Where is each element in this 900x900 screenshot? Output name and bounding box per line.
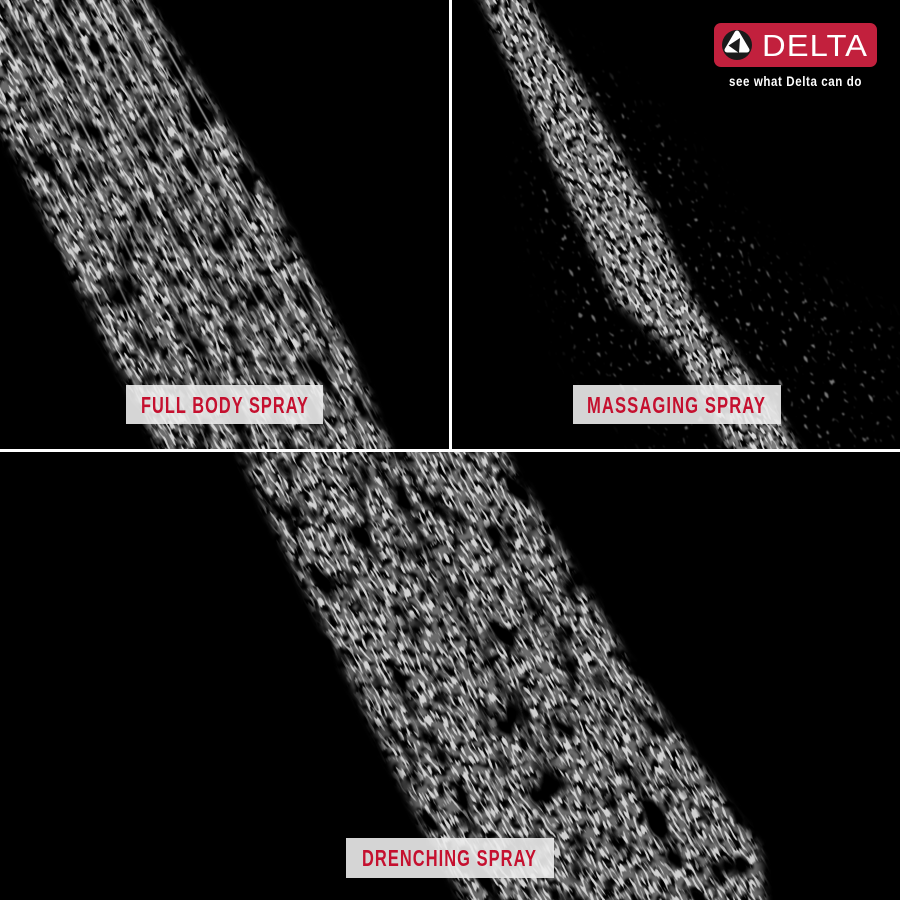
label: full body spray (126, 385, 323, 424)
label: drenching spray: DRENCHING SPRAY (362, 845, 537, 871)
jet streams (0, 0, 390, 460)
label: full body spray: FULL BODY SPRAY (141, 392, 309, 418)
panel: massaging spray (476, 0, 900, 449)
tagline: see what Delta can do (729, 74, 862, 89)
logo wordmark: DELTA (762, 28, 868, 63)
divider: vertical (449, 0, 452, 450)
divider: horizontal (0, 449, 900, 452)
label: massaging spray: MASSAGING SPRAY (587, 392, 766, 418)
logo: Delta (714, 23, 877, 89)
label: massaging spray (573, 385, 781, 424)
label: drenching spray (346, 838, 554, 878)
logo badge (714, 23, 877, 67)
panel: full body spray (0, 0, 396, 449)
icon: Delta triangle emblem (722, 30, 752, 60)
panel: drenching spray (234, 452, 770, 900)
